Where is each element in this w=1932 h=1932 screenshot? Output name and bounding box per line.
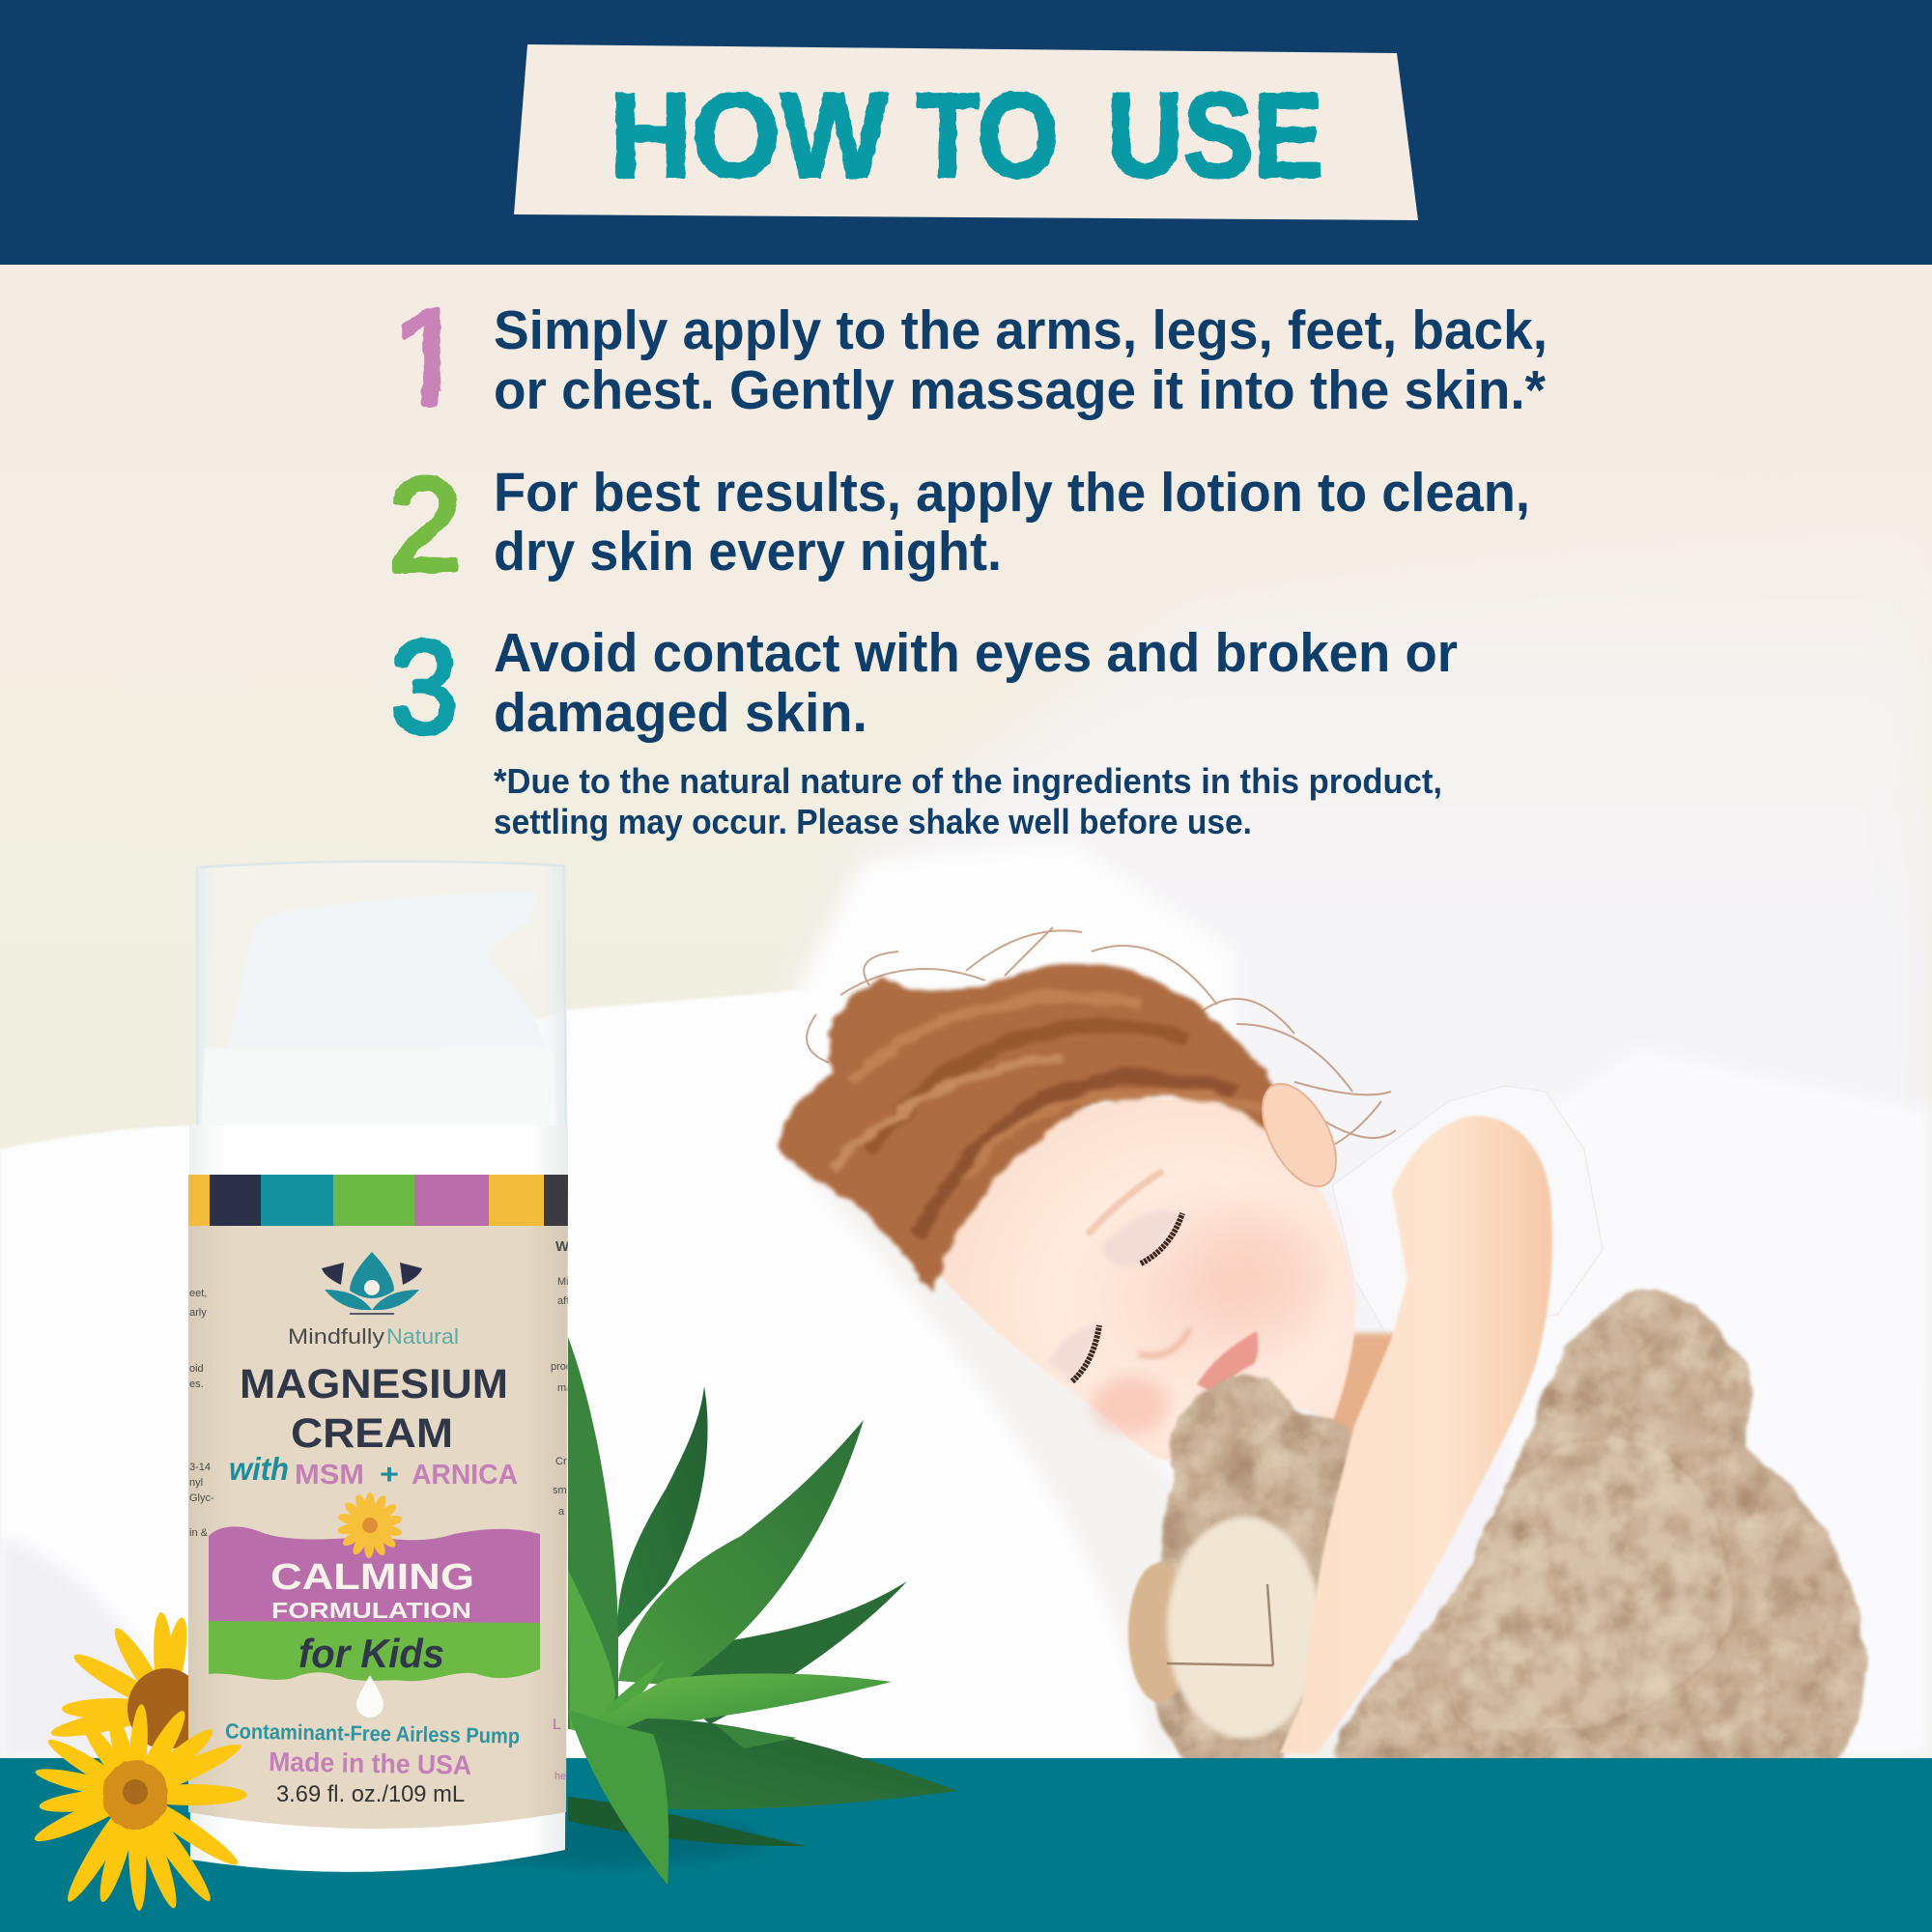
title tape — [514, 44, 1418, 220]
step 2 — [388, 451, 1530, 598]
with MSM + ARNICA: + — [380, 1460, 399, 1491]
side text fragments: small — [553, 1485, 578, 1496]
brand name: Natural — [386, 1324, 459, 1349]
title: TO — [916, 70, 1059, 203]
step 3 — [390, 613, 1458, 760]
side text fragments: afte — [557, 1295, 575, 1307]
claims: Contaminant-Free Airless Pump — [225, 1719, 520, 1748]
side text fragments — [189, 1238, 581, 1782]
colour stripe — [188, 1175, 568, 1226]
hair — [779, 962, 1338, 1294]
step 1 text: Simply apply to the arms, legs, feet, back, — [494, 299, 1548, 361]
background: bed sheets and pillows — [0, 522, 1932, 1758]
side text fragments: arly — [189, 1307, 207, 1319]
cheek blush — [1188, 1217, 1323, 1333]
product bottle — [188, 861, 581, 1872]
teddy bear snout — [1167, 1517, 1321, 1739]
made in the USA: Made in the USA — [269, 1747, 471, 1780]
background: bedroom wall — [0, 265, 1932, 1758]
nose — [1138, 1328, 1190, 1355]
teddy bear body — [1332, 1290, 1865, 1768]
ear — [1247, 1072, 1351, 1198]
volume: 3.69 fl. oz./109 mL — [276, 1781, 465, 1807]
teddy bear ear patch — [1128, 1563, 1190, 1702]
hair wisps — [807, 927, 1396, 1154]
logo: lotus — [322, 1252, 422, 1314]
shirt — [1332, 1086, 1603, 1344]
side text fragments: in & — [189, 1527, 209, 1539]
title: HOW — [610, 70, 888, 203]
title: USE — [1107, 70, 1323, 203]
product shadow on band — [435, 1815, 763, 1865]
side text fragments: mad — [557, 1382, 578, 1394]
side text fragments: 3-14 — [189, 1462, 211, 1473]
step 1 — [402, 307, 1546, 420]
bottle body — [189, 1125, 568, 1872]
teddy bear head — [1136, 1373, 1372, 1768]
step 3 text: Avoid contact with eyes and broken or — [494, 622, 1458, 684]
pink banner — [209, 1526, 540, 1623]
side text fragments: Cre — [555, 1456, 573, 1467]
bear paw over arm — [1447, 1439, 1730, 1732]
side text fragments: eet, — [189, 1288, 207, 1299]
neck — [1323, 1333, 1396, 1449]
flower: arnica behind bottle — [49, 1612, 205, 1749]
eyelids and lashes — [1048, 1210, 1182, 1381]
step 1 text: or chest. Gently massage it into the skin.* — [494, 359, 1547, 421]
flower: arnica in front — [31, 1704, 247, 1911]
side text fragments: Glyc- — [189, 1492, 214, 1504]
calming formulation: CALMING — [270, 1557, 474, 1598]
step 2 text: For best results, apply the lotion to clean, — [494, 462, 1530, 524]
step 2 text: dry skin every night. — [494, 521, 1002, 582]
flower centre — [102, 1760, 168, 1830]
green banner — [209, 1621, 540, 1681]
side text fragments: hell — [554, 1771, 571, 1782]
label — [188, 1175, 581, 1851]
side text fragments: nyl — [189, 1477, 203, 1489]
bear paw shadow — [1459, 1604, 1748, 1719]
number 3: 3 — [390, 613, 458, 760]
side text fragments: prod — [551, 1361, 572, 1373]
collar — [201, 1048, 556, 1130]
brand name: Mindfully — [288, 1324, 384, 1349]
footnote: settling may occur. Please shake well before use. — [494, 802, 1252, 841]
side text fragments: oid — [189, 1363, 204, 1375]
number 1: 1 — [391, 281, 468, 435]
product name: MAGNESIUM — [240, 1361, 508, 1407]
cream drop — [356, 1675, 384, 1718]
side text fragments: Wh — [555, 1238, 578, 1255]
side text fragments: L — [553, 1717, 561, 1733]
bottom teal band — [0, 1758, 1932, 1932]
number 1 — [402, 307, 441, 408]
calming formulation: FORMULATION — [271, 1598, 471, 1623]
pump head — [228, 891, 548, 1048]
with MSM + ARNICA: ARNICA — [412, 1460, 518, 1491]
with MSM + ARNICA: MSM — [295, 1460, 364, 1491]
lips — [1197, 1331, 1258, 1396]
arm — [1280, 1116, 1552, 1753]
side text fragments: a n — [558, 1506, 573, 1518]
side text fragments: es. — [189, 1378, 204, 1390]
product name: CREAM — [291, 1410, 453, 1457]
face — [934, 1098, 1355, 1461]
clear cap — [197, 861, 566, 1130]
aloe plant — [568, 1337, 957, 1885]
photo: sleeping child with teddy bear — [779, 927, 1865, 1768]
with MSM + ARNICA: with — [229, 1451, 289, 1487]
footnote: *Due to the natural nature of the ingredients in this product, — [494, 761, 1442, 801]
side text fragments: Mind — [557, 1276, 581, 1288]
eyebrow — [1088, 1171, 1163, 1235]
number 2: 2 — [388, 451, 462, 598]
label flower — [337, 1492, 403, 1558]
for Kids: for Kids — [298, 1631, 444, 1676]
step 3 text: damaged skin. — [494, 682, 867, 744]
header band — [0, 0, 1932, 265]
